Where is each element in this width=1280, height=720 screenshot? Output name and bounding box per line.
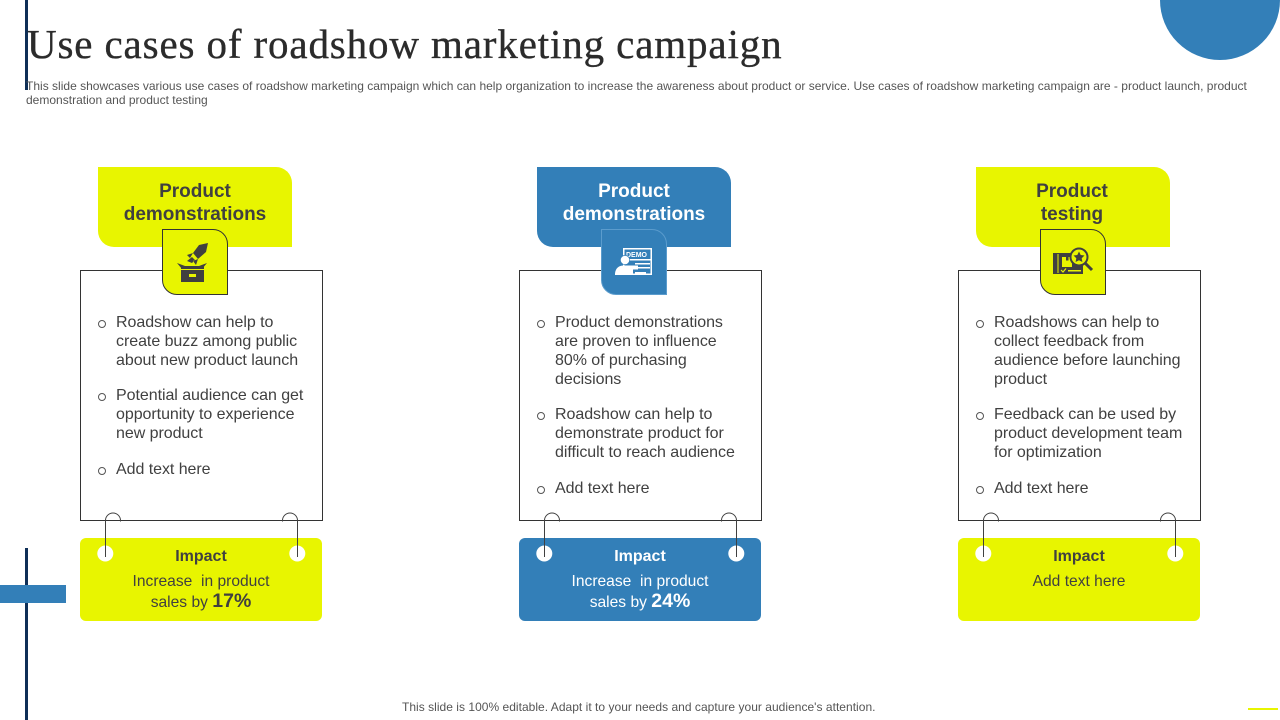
footer accent line [1248,708,1278,710]
bullet 1: create buzz among public [116,333,297,350]
bullet list right [976,314,1182,496]
bullet 2: difficult to reach audience [555,444,735,461]
bullet 2: new product [116,425,203,442]
content box right [958,270,1201,521]
impact text middle: sales by 24% [590,590,690,612]
bullet 1: are proven to influence [555,333,717,350]
heading: product testing: Product [1036,180,1108,202]
heading: product demonstrations yellow [98,167,292,247]
bullet 1 [994,314,1180,388]
impact text left [133,572,270,612]
bullet 2 [555,406,735,461]
bullet list middle [537,314,735,496]
impact text middle [572,572,708,612]
heading: product testing: testing [1041,204,1103,224]
heading: product testing [976,167,1170,247]
bullet 2: Roadshow can help to [555,406,712,422]
bullet 1 [555,314,723,388]
bullet marker 1 [537,320,545,328]
bullet 1: audience before launching [994,352,1180,369]
bullet marker 1 [98,320,106,328]
bullet marker 2 [98,392,106,400]
title: Use cases of roadshow marketing campaign [27,21,782,67]
impact text left: sales by 17% [151,590,251,612]
impact heading middle: Impact [614,548,666,565]
heading: product demonstrations yellow: demonstrations [124,204,266,224]
bullet 1: collect feedback from [994,333,1144,350]
bullet 2: for optimization [994,444,1102,461]
subtitle description [26,79,1247,107]
bullet 2 [994,406,1182,461]
impact text right: Add text here [1033,572,1125,590]
impact card right [958,538,1200,621]
icon: demo presenter [601,229,667,295]
impact card middle [519,538,761,621]
bullet marker 1 [976,320,984,328]
bullet 3: Add text here [116,460,211,478]
impact card left [80,538,322,621]
bullet 1: 80% of purchasing [555,352,687,369]
bullet 1: about new product launch [116,352,298,369]
heading: product demonstrations blue: demonstrations [563,204,705,224]
bullet 3: Add text here [555,480,650,496]
heading: product demonstrations blue [537,167,731,247]
bullet 2 [116,386,304,442]
bullet 1: decisions [555,371,621,388]
bullet 2: demonstrate product for [555,425,724,442]
bullet 1: Roadshow can help to [116,314,273,330]
bullet marker 2 [976,412,984,420]
content box left [80,270,323,521]
bullet 1: Product demonstrations [555,314,723,330]
bullet marker 2 [537,412,545,420]
bullet 3: Add text here [994,480,1089,496]
bullet 2: product development team [994,425,1182,442]
subtitle description: This slide showcases various use cases of roadshow marketing campaign which can help organization to increase the awareness about product or service. Use cases of roadshow marketing campaign are - product launch, product [26,79,1247,93]
decorative circle top right [1160,0,1280,60]
heading: product demonstrations yellow: Product [159,180,231,202]
impact text middle: Increase in product [572,572,708,590]
bullet 2: opportunity to experience [116,406,294,423]
impact hooks middle [536,512,744,562]
impact heading left: Impact [175,548,227,565]
bullet 2: Potential audience can get [116,386,303,404]
bullet list left [98,314,304,478]
impact hooks left [97,512,306,562]
footer note: This slide is 100% editable. Adapt it to your needs and capture your audience's attention. [402,700,876,714]
impact text left: Increase in product [133,572,269,590]
subtitle description: demonstration and product testing [26,93,208,107]
left accent line top [25,0,28,90]
icon: demo presenter: DEMO [626,252,648,259]
left accent line bottom [25,548,28,720]
icon: blueprint with magnifier [1040,229,1106,295]
content box middle [519,270,762,521]
bullet 1: Roadshows can help to [994,314,1159,330]
bullet 1 [116,314,298,369]
heading: product demonstrations blue: Product [598,180,670,202]
bullet marker 3 [537,486,545,494]
left accent bar [0,585,66,603]
bullet 2: Feedback can be used by [994,406,1176,422]
bullet 1: product [994,371,1047,388]
bullet marker 3 [976,486,984,494]
bullet marker 3 [98,466,106,474]
impact hooks right [975,512,1184,562]
icon: rocket in box [162,229,228,295]
impact heading right: Impact [1053,548,1105,565]
